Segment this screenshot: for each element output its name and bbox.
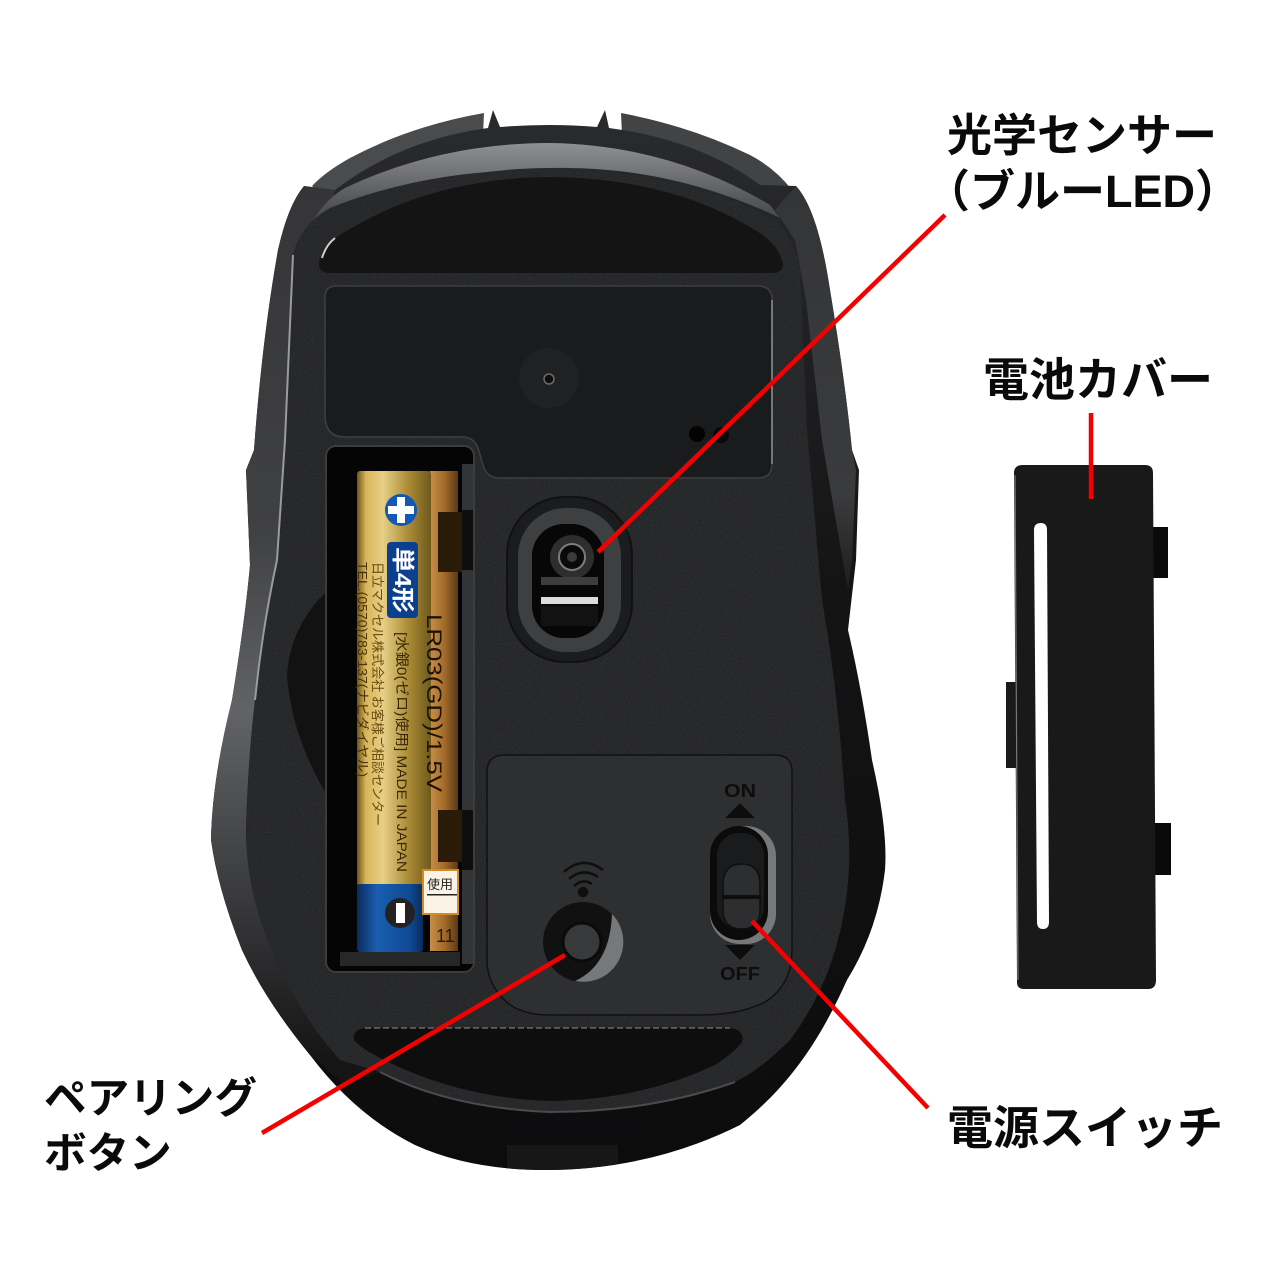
callout line: optical sensor bbox=[598, 215, 945, 552]
power and pairing panel bbox=[487, 755, 792, 1015]
bottom foot pad bbox=[354, 1028, 742, 1101]
two holes bbox=[689, 426, 705, 442]
callout line: battery cover bbox=[1089, 413, 1093, 499]
lens bbox=[550, 535, 594, 579]
label: pairing: ペアリング bbox=[44, 1075, 257, 1123]
battery maker line: 日立マクセル株式会社 お客様ご相談センター bbox=[370, 562, 385, 826]
battery phone line: TEL.(0570)783-137(ナビダイヤル) bbox=[355, 562, 370, 777]
bottom shell centre patch bbox=[507, 1145, 618, 1172]
battery notes line: [水銀0(ゼロ)使用] MADE IN JAPAN bbox=[394, 632, 410, 872]
plus symbol bbox=[385, 494, 417, 526]
left palm recess bbox=[287, 588, 330, 800]
pairing button bbox=[543, 902, 623, 982]
right side button wedge bbox=[621, 113, 792, 198]
left side grey band bbox=[211, 186, 380, 1085]
plate edge highlight bbox=[255, 255, 293, 700]
mouse underside diagram bbox=[46, 110, 1220, 1171]
label: blue LED: （ブルーLED） bbox=[925, 166, 1240, 217]
bottom plate bbox=[246, 170, 849, 1112]
battery cover bbox=[1006, 465, 1171, 989]
callout line: power switch bbox=[752, 921, 928, 1108]
AAA size badge bbox=[387, 542, 418, 618]
top foot pad bbox=[319, 177, 783, 273]
callout line: pairing button bbox=[262, 955, 565, 1133]
caution label bbox=[423, 870, 458, 946]
up triangle bbox=[725, 803, 755, 818]
AAA battery bbox=[355, 471, 462, 952]
battery model text: LR03(GD)/1.5V bbox=[422, 614, 445, 792]
top highlight band bbox=[300, 143, 780, 250]
moulding mark bbox=[519, 348, 579, 408]
label: power switch: 電源スイッチ bbox=[947, 1102, 1223, 1154]
down triangle bbox=[725, 945, 755, 960]
left side button wedge bbox=[312, 113, 484, 196]
caution label: 11 bbox=[436, 926, 455, 946]
label: button: ボタン bbox=[44, 1130, 172, 1178]
label: battery cover: 電池カバー bbox=[983, 354, 1213, 406]
wireless icon bbox=[564, 863, 603, 896]
optical sensor bbox=[507, 497, 632, 662]
AAA size badge: 単4形 bbox=[390, 547, 416, 613]
ON marking: ON bbox=[724, 781, 756, 801]
right side grey band bbox=[775, 186, 856, 590]
power switch bbox=[710, 826, 776, 944]
outer shell bbox=[211, 110, 885, 1170]
negative symbol bbox=[385, 898, 415, 928]
top recessed panel bbox=[325, 286, 772, 478]
label: optical sensor: 光学センサー bbox=[947, 110, 1217, 161]
mouse body bbox=[211, 110, 885, 1172]
caution label: 使用 bbox=[427, 877, 453, 892]
plate surface speckle bbox=[240, 165, 860, 1120]
OFF marking: OFF bbox=[720, 964, 760, 984]
plate lower edge bbox=[380, 1072, 735, 1112]
cover slot bbox=[1034, 523, 1049, 929]
battery compartment bbox=[326, 446, 474, 972]
